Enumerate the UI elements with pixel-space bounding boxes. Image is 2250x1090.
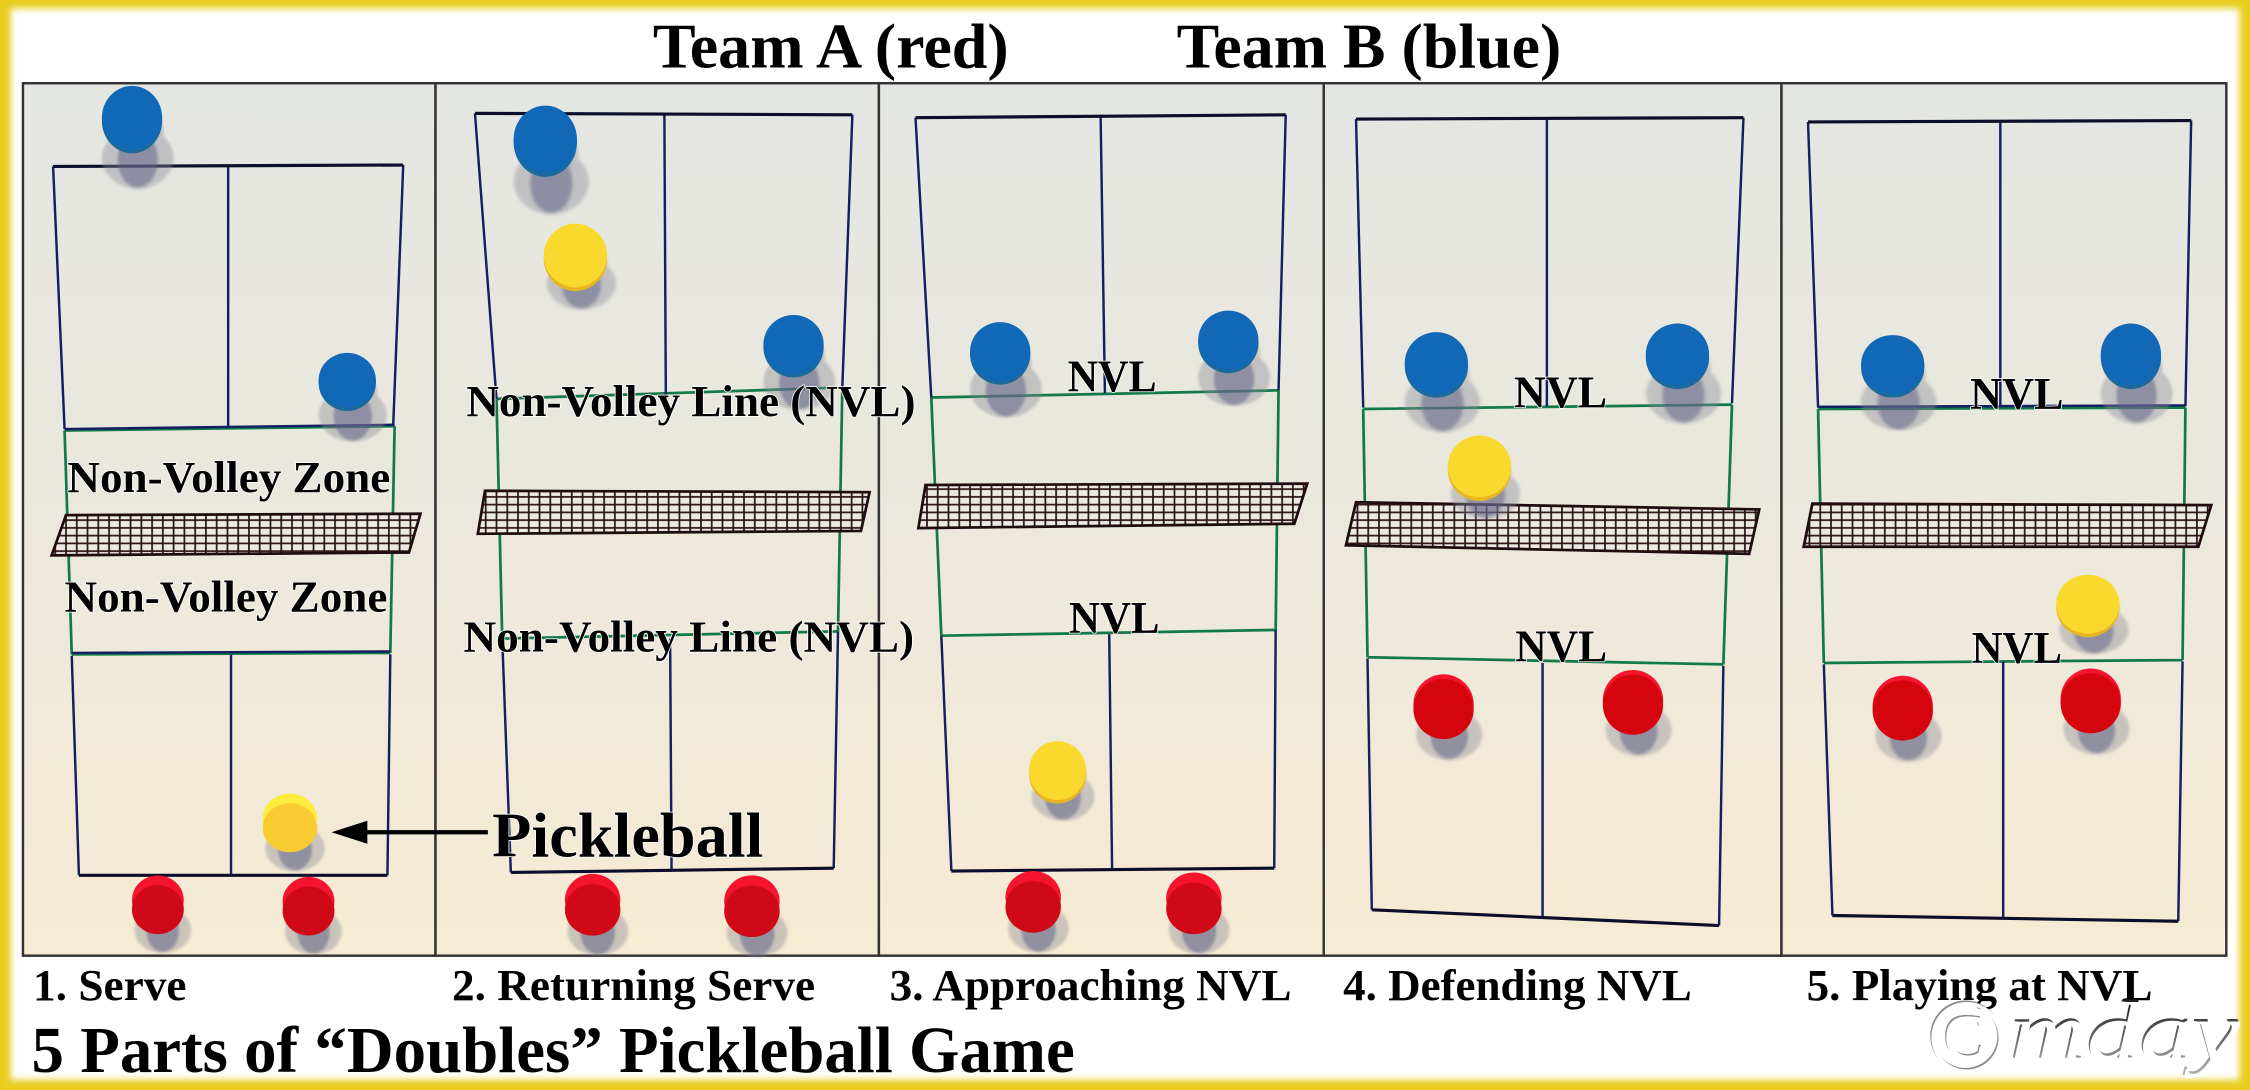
red player, right — [1603, 670, 1672, 756]
panel 5: playing at NVL — [1781, 83, 2226, 956]
caption 4: 4. Defending NVL — [1343, 960, 1692, 1010]
label: lower non-volley line, panel 2: Non-Volley Line (NVL) — [463, 611, 914, 661]
yellow pickleball — [1029, 741, 1094, 821]
watermark: copyright mday: mday — [2010, 987, 2240, 1079]
heading: Team A (red): Team A (red) — [653, 11, 1009, 81]
main title: 5 Parts of “Doubles” Pickleball Game — [32, 1014, 1075, 1087]
red player, left — [1005, 871, 1069, 953]
label: upper NVL, panel 3: NVL — [1068, 351, 1157, 402]
label: lower non-volley zone, panel 1: Non-Volley Zone — [65, 571, 387, 621]
net, panel 4 — [1346, 502, 1759, 554]
net, panel 2 — [478, 491, 870, 534]
panel 2: returning serve — [436, 83, 879, 957]
net, panel 5 — [1804, 504, 2211, 547]
panel 1: serve — [23, 83, 436, 956]
blue player, left — [970, 322, 1042, 418]
blue player, left — [1405, 332, 1480, 432]
caption 5: 5. Playing at NVL — [1807, 960, 2152, 1010]
court lines, panel 3 — [915, 115, 1286, 871]
label: lower NVL, panel 3: NVL — [1069, 592, 1159, 643]
net, panel 1 — [52, 514, 420, 555]
blue player, far left — [102, 86, 174, 189]
label: Pickleball: Pickleball — [492, 801, 763, 871]
caption 3: 3. Approaching NVL — [890, 960, 1291, 1010]
label: upper NVL, panel 5: NVL — [1970, 368, 2063, 419]
red player, right — [724, 875, 788, 957]
net, panel 3 — [918, 484, 1307, 528]
red player, left — [132, 875, 191, 953]
court lines, panel 5 — [1808, 121, 2191, 921]
blue player, near right — [763, 315, 835, 410]
heading: Team B (blue): Team B (blue) — [1177, 11, 1561, 81]
label: upper NVL, panel 4: NVL — [1514, 367, 1607, 418]
court lines, panel 1 — [53, 165, 403, 875]
red player, right — [2061, 669, 2129, 754]
court lines, panel 4 — [1356, 118, 1743, 926]
blue player, far left — [514, 106, 589, 214]
blue player, left — [1861, 335, 1936, 430]
blue player, right — [1198, 311, 1270, 406]
yellow pickleball — [544, 224, 616, 310]
red player, right — [1166, 872, 1230, 954]
court lines, panel 2 — [475, 113, 852, 872]
label: lower NVL, panel 5: NVL — [1972, 622, 2062, 673]
red player, right — [283, 877, 342, 955]
yellow pickleball — [1448, 435, 1520, 519]
label: upper non-volley zone, panel 1: Non-Volley Zone — [67, 452, 390, 502]
blue player, right — [2101, 324, 2173, 424]
panel 4: defending NVL — [1324, 83, 1781, 956]
watermark: copyright mday — [1926, 977, 2240, 1090]
red player, left — [1413, 674, 1482, 760]
blue player, near right — [319, 353, 387, 442]
caption 1: 1. Serve — [33, 960, 187, 1010]
red player, left — [1873, 676, 1941, 762]
callout: pickleball arrow and label — [331, 801, 763, 871]
yellow pickleball — [2056, 575, 2129, 654]
label: upper non-volley line, panel 2: Non-Volley Line (NVL) — [466, 376, 915, 426]
caption 2: 2. Returning Serve — [452, 960, 815, 1010]
arrow pointing to the ball — [331, 821, 488, 844]
watermark: copyright mday: mday — [2009, 985, 2239, 1077]
red player, left — [565, 874, 628, 956]
panel 3: approaching NVL — [879, 83, 1324, 956]
yellow pickleball — [263, 794, 325, 871]
label: lower NVL, panel 4: NVL — [1515, 621, 1607, 672]
blue player, right — [1646, 324, 1721, 424]
